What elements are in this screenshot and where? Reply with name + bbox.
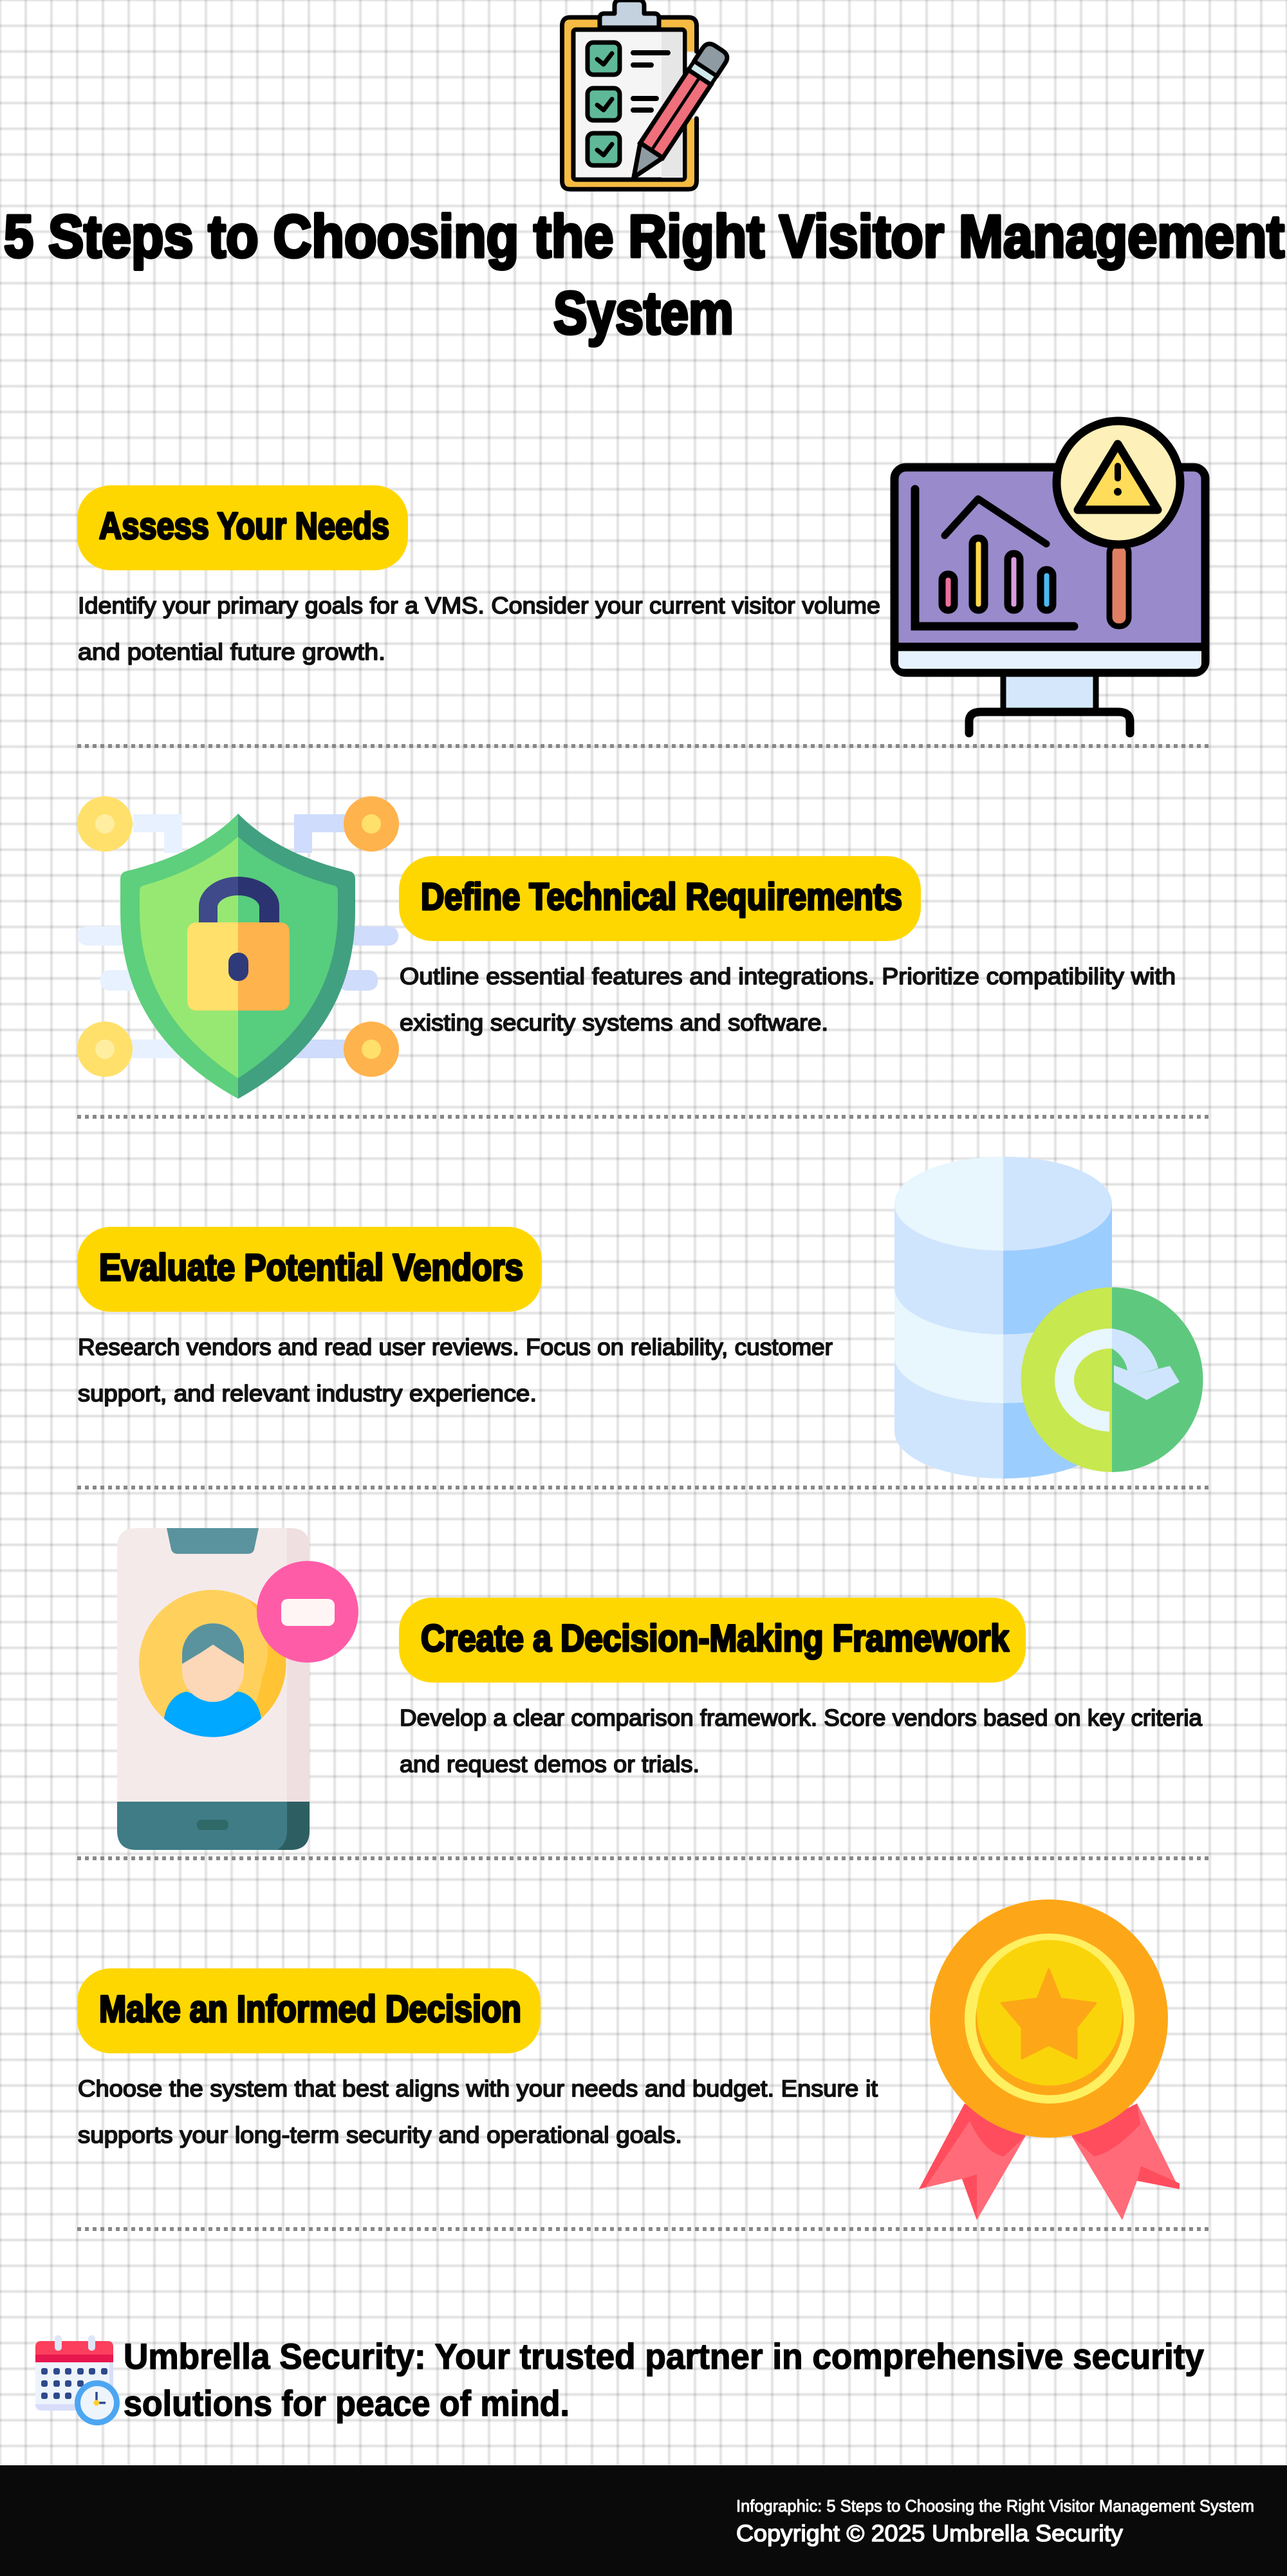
footer bar (0, 2465, 1287, 2576)
footer text: infographic name and copyright: Infographic: 5 Steps to Choosing the Right Visitor Management System (736, 2496, 1254, 2515)
text block: step 2 description (400, 963, 1176, 1036)
heading pill: make an informed decision: Make an Informed Decision (99, 1988, 521, 2030)
heading pill: assess your needs: Assess Your Needs (99, 505, 389, 547)
icon: calendar with clock (35, 2335, 120, 2425)
text block: step 5 description: Choose the system that best aligns with your needs and budget. Ensure it (78, 2075, 878, 2102)
panel: step 2 define technical requirements (77, 796, 1176, 1099)
text block: step 1 description: Identify your primary goals for a VMS. Consider your current visitor volume (78, 592, 880, 619)
panel: step 1 assess your needs (77, 421, 1205, 733)
text block: step 4 description (400, 1704, 1203, 1777)
icon: monitor with chart and warning magnifier (894, 421, 1205, 733)
heading pill: assess your needs (77, 485, 408, 570)
icon: shield with padlock and circuit nodes (77, 796, 399, 1099)
text block: step 3 description: support, and relevant industry experience. (78, 1380, 537, 1406)
text block: step 1 description: and potential future growth. (78, 639, 385, 665)
text block: step 1 description (78, 592, 880, 665)
closing tagline (124, 2336, 1204, 2423)
title: System (553, 279, 734, 346)
title (4, 203, 1284, 346)
footer text: infographic name and copyright: Copyright © 2025 Umbrella Security (736, 2520, 1123, 2546)
heading pill: define technical requirements: Define Technical Requirements (421, 876, 902, 918)
heading pill: create a decision-making framework (399, 1598, 1026, 1683)
closing tagline: solutions for peace of mind. (124, 2383, 569, 2423)
heading pill: evaluate potential vendors (77, 1227, 542, 1312)
icon: database cylinder with refresh badge (894, 1157, 1203, 1479)
footer text: infographic name and copyright (736, 2496, 1254, 2546)
closing tagline: Umbrella Security: Your trusted partner in comprehensive security (124, 2336, 1204, 2376)
text block: step 4 description: Develop a clear comparison framework. Score vendors based on key criteria (400, 1704, 1203, 1731)
heading pill: evaluate potential vendors: Evaluate Potential Vendors (99, 1247, 523, 1289)
text block: step 3 description (78, 1334, 833, 1406)
heading pill: define technical requirements (399, 856, 921, 941)
text block: step 5 description: supports your long-term security and operational goals. (78, 2122, 682, 2148)
text block: step 5 description (78, 2075, 878, 2148)
heading pill: create a decision-making framework: Create a Decision-Making Framework (421, 1618, 1010, 1659)
text block: step 2 description: Outline essential features and integrations. Prioritize compatibility with (400, 963, 1176, 989)
icon: gold medal with star and ribbons (919, 1899, 1180, 2220)
panel: step 5 make an informed decision (77, 1899, 1180, 2220)
text block: step 4 description: and request demos or trials. (400, 1751, 699, 1777)
text block: step 2 description: existing security systems and software. (400, 1009, 828, 1036)
panel: step 3 evaluate potential vendors (77, 1157, 1203, 1479)
heading pill: make an informed decision (77, 1968, 541, 2053)
panel: step 4 create a decision-making framework (117, 1528, 1203, 1850)
icon: phone with user avatar and minus badge (117, 1528, 358, 1850)
icon: clipboard with checklist and pencil (562, 0, 730, 189)
text block: step 3 description: Research vendors and read user reviews. Focus on reliability, customer (78, 1334, 833, 1360)
